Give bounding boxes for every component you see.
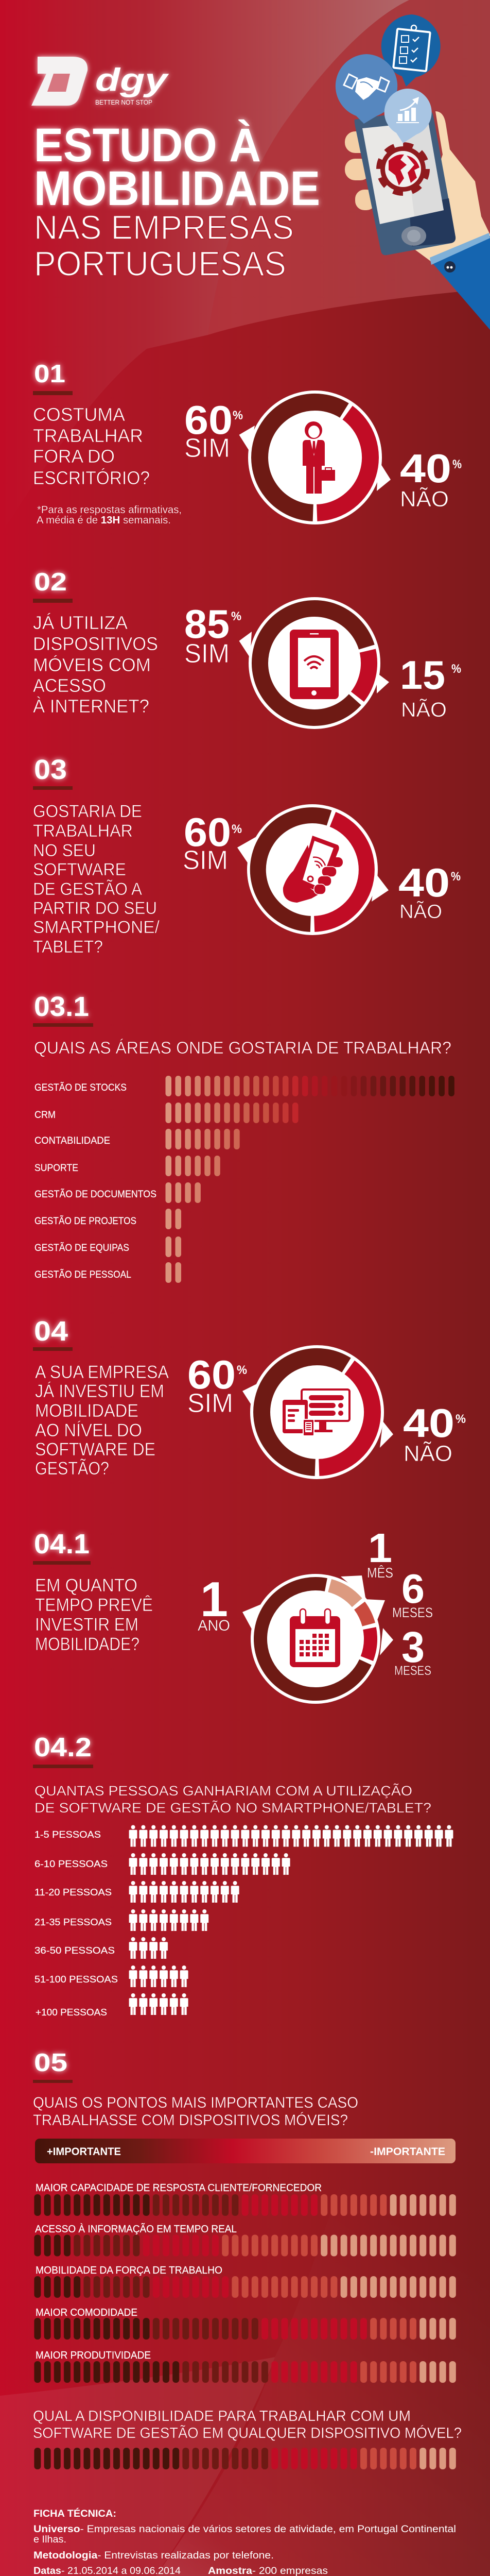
value: 3 meses: 3 <box>401 1623 425 1671</box>
value: 1 mes: MÊS <box>367 1565 393 1581</box>
question text: SOFTWARE DE <box>35 1439 155 1460</box>
title: PORTUGUESAS <box>34 244 286 283</box>
illustration: hand holding phone with bubbles <box>336 14 490 330</box>
bar labels: GESTÃO DE PESSOAL <box>34 1269 131 1280</box>
row: mobilidade da forca de trabalho: MOBILIDADE DA FORÇA DE TRABALHO <box>36 2265 222 2276</box>
question text: PARTIR DO SEU <box>33 899 157 918</box>
value: 6 meses: 6 <box>401 1566 425 1612</box>
bar labels: SUPORTE <box>34 1163 78 1174</box>
section 04.1 <box>33 1525 433 1704</box>
heading number 02 <box>33 568 73 603</box>
value: 3 meses: MESES <box>394 1664 431 1678</box>
question text: GESTÃO? <box>35 1459 109 1479</box>
details <box>33 2524 456 2576</box>
donut chart with devices icon <box>242 1345 393 1479</box>
heading number 03: 03 <box>34 754 67 785</box>
donut chart with tablet icon <box>239 597 389 729</box>
heading number 05 <box>33 2049 73 2083</box>
value: 40% nao <box>403 1400 466 1466</box>
question text: MÓVEIS COM <box>33 654 151 675</box>
question text: AO NÍVEL DO <box>35 1420 142 1440</box>
value: 3 meses <box>394 1623 431 1678</box>
bar labels: GESTÃO DE STOCKS <box>34 1082 127 1093</box>
bar labels: GESTÃO DE DOCUMENTOS <box>34 1189 156 1200</box>
question text: DE GESTÃO A <box>33 879 142 899</box>
footnote <box>37 504 182 526</box>
row: informacao em tempo real: ACESSO À INFORMAÇÃO EM TEMPO REAL <box>35 2223 237 2235</box>
question text: A SUA EMPRESA <box>35 1362 169 1382</box>
details: Metodologia - Entrevistas realizadas por telefone. <box>33 2550 274 2561</box>
technical sheet <box>33 2508 456 2576</box>
value: 40% nao: 40 <box>403 1400 454 1446</box>
bar labels: GESTÃO DE EQUIPAS <box>34 1242 129 1253</box>
heading number 04 <box>33 1316 73 1351</box>
bubble: handshake <box>336 54 397 124</box>
bar labels: CONTABILIDADE <box>34 1136 110 1146</box>
heading number 03 <box>33 754 73 790</box>
heading number 04.1: 04.1 <box>34 1529 90 1560</box>
heading number 02: 02 <box>34 568 67 596</box>
section 02 <box>33 568 461 729</box>
importance legend bar: +IMPORTANTE <box>47 2146 121 2158</box>
heading: FICHA TÉCNICA: <box>33 2508 116 2519</box>
value: 40% nao: NÃO <box>399 901 442 923</box>
value: 40% nao: NÃO <box>400 487 449 512</box>
row: maior produtividade: MAIOR PRODUTIVIDADE <box>36 2350 151 2361</box>
value: 85% sim: 85 <box>184 601 230 647</box>
section 05 <box>32 2049 458 2383</box>
row labels: 1-5 PESSOAS <box>34 1829 101 1840</box>
logo: dgy better not stop: BETTER NOT STOP <box>95 98 152 106</box>
value: 40% nao: % <box>451 870 461 884</box>
row labels: 36-50 PESSOAS <box>34 1945 115 1956</box>
row: informacao em tempo real <box>32 2223 458 2257</box>
value: 85% sim: SIM <box>184 639 230 669</box>
row: mobilidade da forca de trabalho <box>32 2265 458 2298</box>
heading number 04.2: 04.2 <box>34 1733 92 1762</box>
question text: COSTUMA <box>33 404 125 425</box>
question text: GOSTARIA DE <box>33 802 142 821</box>
section 04.2 <box>33 1733 454 2018</box>
value: 40% nao: 40 <box>398 860 450 905</box>
icon: hand holding smartphone <box>283 836 343 903</box>
section 03.1 <box>33 991 454 1283</box>
value: 6 meses <box>392 1566 433 1620</box>
question text: JÁ INVESTIU EM <box>35 1381 164 1401</box>
row: maior comodidade <box>32 2307 458 2340</box>
row: resposta cliente/fornecedor: MAIOR CAPACIDADE DE RESPOSTA CLIENTE/FORNECEDOR <box>36 2182 322 2194</box>
icon: monitor, tablet and phone <box>283 1389 349 1436</box>
value: 1 mes: 1 <box>368 1525 392 1571</box>
question text: TABLET? <box>33 937 103 957</box>
details: Universo - Empresas nacionais de vários setores de atividade, em Portugal Continental <box>33 2524 456 2535</box>
logo: dgy better not stop <box>31 57 169 106</box>
question text: JÁ UTILIZA <box>33 612 128 633</box>
value: 40% nao: 40 <box>400 446 451 491</box>
row labels: 51-100 PESSOAS <box>34 1974 118 1985</box>
row: maior comodidade: MAIOR COMODIDADE <box>36 2307 137 2318</box>
question text <box>33 404 150 488</box>
question text: TRABALHAR <box>33 425 143 446</box>
icon: gear and globe <box>379 145 427 193</box>
value: 60% sim <box>184 397 243 463</box>
question text <box>35 1575 153 1654</box>
question text <box>33 2408 462 2442</box>
bar labels: GESTÃO DE PROJETOS <box>34 1215 136 1227</box>
question text <box>33 2094 358 2129</box>
row labels: 21-35 PESSOAS <box>34 1917 112 1927</box>
footnote: *Para as respostas afirmativas, <box>37 504 182 516</box>
question text <box>33 612 158 717</box>
question text: SOFTWARE <box>33 860 126 879</box>
title <box>34 119 320 283</box>
bubble: checklist <box>381 14 441 87</box>
donut chart with hand icon <box>237 804 389 935</box>
title: ESTUDO À <box>34 119 261 172</box>
value: 15% nao: NÃO <box>401 698 447 721</box>
heading number 03.1: 03.1 <box>34 991 89 1022</box>
question text: QUANTAS PESSOAS GANHARIAM COM A UTILIZAÇÃO <box>34 1783 412 1799</box>
importance legend bar: -IMPORTANTE <box>370 2146 445 2158</box>
row labels: 11-20 PESSOAS <box>34 1887 112 1897</box>
value: 40% nao <box>398 860 461 923</box>
icon: tablet with wifi <box>290 630 339 699</box>
question text: QUAIS OS PONTOS MAIS IMPORTANTES CASO <box>33 2094 358 2111</box>
question text: ACESSO <box>33 675 106 696</box>
availability question <box>32 2408 462 2469</box>
value: 60% sim: % <box>232 822 242 836</box>
question text: QUAIS AS ÁREAS ONDE GOSTARIA DE TRABALHAR? <box>34 1038 451 1057</box>
bar labels <box>34 1082 156 1280</box>
logo: dgy better not stop: dgy <box>95 62 169 98</box>
row labels: 6-10 PESSOAS <box>34 1858 108 1869</box>
heading number 01 <box>33 360 73 395</box>
pictogram chart of people <box>128 1825 454 2015</box>
value: 60% sim: % <box>237 1363 247 1377</box>
value: 60% sim <box>183 809 242 875</box>
row labels <box>34 1829 118 2018</box>
question text: MOBILIDADE? <box>35 1634 139 1654</box>
heading number 01: 01 <box>34 360 65 388</box>
row: resposta cliente/fornecedor <box>32 2182 458 2216</box>
value: 60% sim: 60 <box>187 1352 236 1397</box>
question text: DE SOFTWARE DE GESTÃO NO SMARTPHONE/TABLET? <box>34 1800 431 1816</box>
pill scale <box>32 2448 458 2469</box>
pill bar chart <box>166 1076 454 1283</box>
value: 85% sim: % <box>231 609 241 623</box>
value: 15% nao <box>400 652 461 721</box>
details: e Ilhas. <box>33 2534 66 2545</box>
question text <box>34 1783 431 1816</box>
question text: DISPOSITIVOS <box>33 633 158 654</box>
row: maior produtividade <box>32 2350 458 2383</box>
question text: SMARTPHONE/ <box>33 918 160 937</box>
bubble: growth chart <box>384 89 432 143</box>
value: 40% nao: % <box>452 457 462 471</box>
heading number 04: 04 <box>34 1316 68 1347</box>
value: 15% nao: 15 <box>400 652 445 698</box>
question text: À INTERNET? <box>33 696 149 717</box>
value: 60% sim: SIM <box>184 433 230 463</box>
donut chart with person icon <box>239 391 391 524</box>
question text: MOBILIDADE <box>35 1401 138 1421</box>
value: 1 ano: ANO <box>198 1617 230 1634</box>
value: 60% sim: 60 <box>184 397 233 443</box>
value: 40% nao: % <box>456 1412 466 1426</box>
question text: INVESTIR EM <box>35 1615 138 1635</box>
question text: TEMPO PREVÊ <box>35 1595 153 1615</box>
section 04 <box>33 1316 466 1479</box>
question text: QUAL A DISPONIBILIDADE PARA TRABALHAR COM UM <box>33 2408 411 2425</box>
question text: TRABALHASSE COM DISPOSITIVOS MÓVEIS? <box>33 2112 348 2129</box>
question text <box>33 802 160 957</box>
question text: FORA DO <box>33 446 115 467</box>
value: 6 meses: MESES <box>392 1605 433 1620</box>
heading number 05: 05 <box>34 2049 67 2077</box>
title: MOBILIDADE <box>34 161 320 216</box>
question text: ESCRITÓRIO? <box>33 467 150 488</box>
question text: NO SEU <box>33 841 96 860</box>
question text: EM QUANTO <box>35 1575 137 1596</box>
value: 40% nao <box>400 446 462 512</box>
value: 60% sim <box>187 1352 247 1418</box>
section 03 <box>33 754 461 957</box>
value: 60% sim: SIM <box>187 1388 233 1418</box>
importance legend bar <box>35 2139 456 2163</box>
value: 40% nao: NÃO <box>404 1440 452 1466</box>
value: 60% sim: SIM <box>183 845 228 875</box>
value: 60% sim: % <box>233 409 243 422</box>
row labels: +100 PESSOAS <box>36 2007 107 2018</box>
question text: TRABALHAR <box>33 821 133 841</box>
question text: SOFTWARE DE GESTÃO EM QUALQUER DISPOSITIVO MÓVEL? <box>33 2424 462 2442</box>
bar labels: CRM <box>34 1110 56 1121</box>
footnote: A média é de 13H semanais. <box>37 515 171 526</box>
icon: calendar <box>290 1609 340 1667</box>
value: 85% sim <box>184 601 241 669</box>
value: 15% nao: % <box>451 662 461 676</box>
title: NAS EMPRESAS <box>34 208 294 246</box>
value: 1 ano: 1 <box>200 1572 228 1627</box>
segmented donut with calendar icon <box>242 1574 393 1704</box>
icon: businessman <box>303 421 335 494</box>
question text <box>35 1362 169 1479</box>
value: 60% sim: 60 <box>184 809 231 855</box>
section 01 <box>33 360 462 526</box>
